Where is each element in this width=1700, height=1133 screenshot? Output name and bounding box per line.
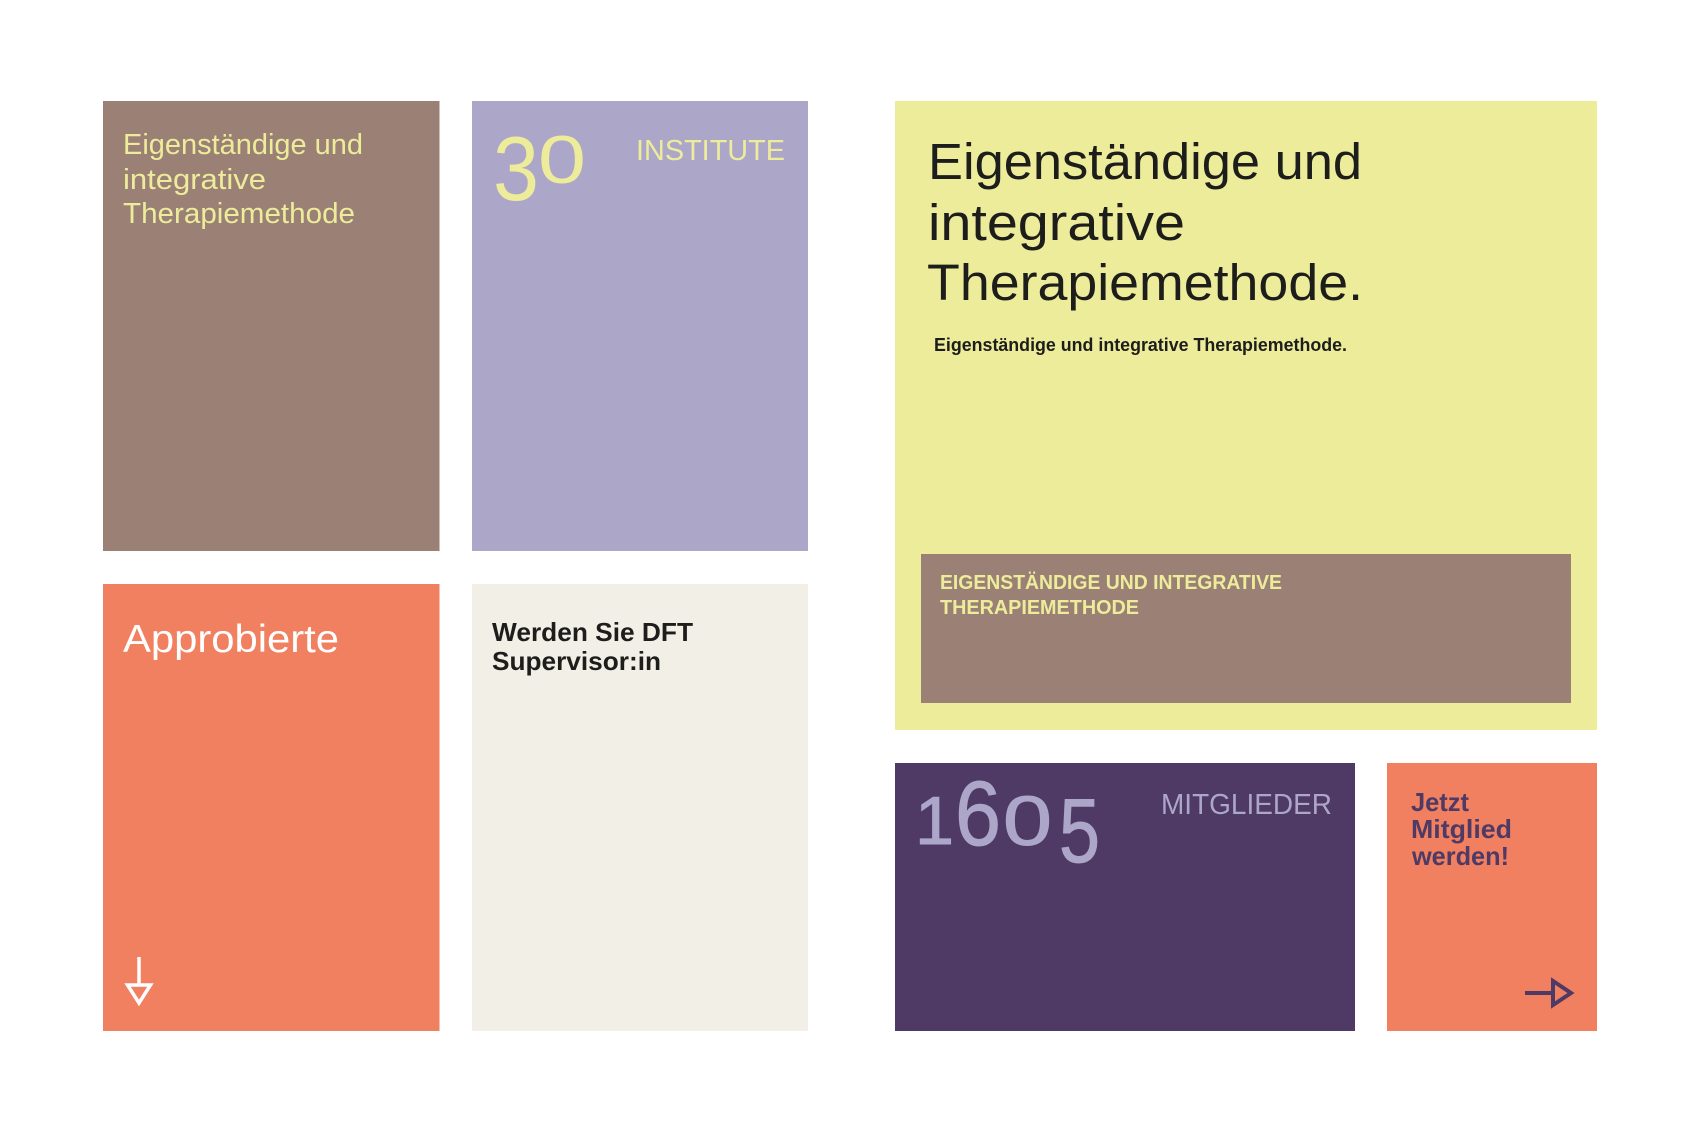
- heading: hero title: [927, 133, 1363, 311]
- text: hero subtitle: Eigenständige und integrative Therapiemethode.: [934, 335, 1347, 355]
- panel: institutes stat: [472, 101, 808, 551]
- text: supervisor call: Werden Sie DFT: [492, 617, 693, 647]
- heading: approbierte: Approbierte: [123, 618, 339, 661]
- panel: yellow hero: [895, 101, 1597, 730]
- panel: inner brown box: [921, 554, 1571, 703]
- icon: down arrow: [128, 957, 150, 1003]
- panel: approbierte: [103, 584, 440, 1031]
- text: intro label: integrative: [123, 164, 266, 196]
- panel: brown intro: [103, 101, 440, 551]
- number: 1605: 5: [1059, 781, 1100, 882]
- text: supervisor call: [492, 617, 693, 676]
- text: intro label: Therapiemethode: [123, 198, 355, 230]
- panel: members stat: [895, 763, 1355, 1031]
- number: 1605: 1: [915, 783, 954, 859]
- label: mitglieder: MITGLIEDER: [1161, 789, 1332, 821]
- text: inner box caption: [940, 571, 1282, 619]
- text: join call: Jetzt: [1411, 787, 1469, 817]
- text: join call: [1411, 787, 1512, 871]
- icon: right arrow: [1525, 981, 1571, 1005]
- text: join call: werden!: [1411, 841, 1509, 871]
- text: intro label: [123, 129, 363, 230]
- heading: hero title: integrative: [928, 194, 1185, 251]
- text: supervisor call: Supervisor:in: [492, 646, 661, 676]
- number: 1605: [915, 763, 1100, 882]
- panel: supervisor: [472, 584, 808, 1031]
- heading: hero title: Therapiemethode.: [927, 254, 1363, 311]
- text: inner box caption: EIGENSTÄNDIGE UND INTEGRATIVE: [940, 571, 1282, 594]
- number: 1605: 6: [955, 763, 1001, 865]
- number: 1605: 0: [1003, 782, 1052, 860]
- number: 30: 3: [493, 119, 539, 220]
- label: institute: INSTITUTE: [636, 135, 785, 167]
- text: join call: Mitglied: [1411, 814, 1512, 844]
- heading: hero title: Eigenständige und: [928, 133, 1362, 190]
- panel: join call to action: [1387, 763, 1597, 1031]
- number: 30: 0: [538, 122, 586, 198]
- text: inner box caption: THERAPIEMETHODE: [940, 596, 1139, 619]
- text: intro label: Eigenständige und: [123, 129, 363, 161]
- number: 30: [493, 119, 586, 220]
